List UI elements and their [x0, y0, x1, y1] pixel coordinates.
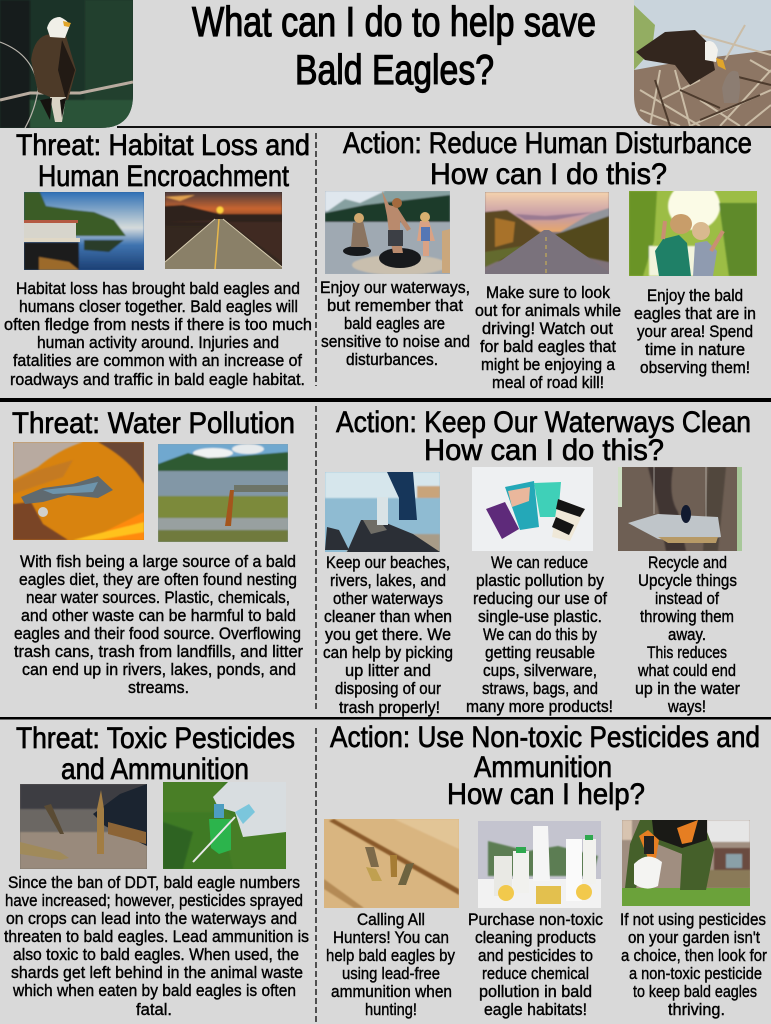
text: enjoy waterways: disturbances.	[346, 350, 438, 369]
text: calling all hunters: Calling All	[357, 910, 425, 929]
photo: children on a lake	[325, 191, 450, 274]
text: calling all hunters: help bald eagles by	[326, 946, 455, 965]
text: calling all hunters: ammunition when	[331, 982, 452, 1001]
text: recycle and upcycle: throwing them	[640, 607, 734, 626]
heading: action keep waterways clean	[336, 406, 751, 467]
text: recycle and upcycle: what could end	[637, 661, 736, 680]
text: look out while driving: driving! Watch out	[482, 319, 613, 338]
heading: action non-toxic: Ammunition	[474, 751, 612, 784]
heading: threat water pollution: Threat: Water Pollution	[12, 407, 295, 440]
text: enjoy waterways: but remember that	[327, 296, 463, 315]
text: recycle and upcycle: Recycle and	[648, 553, 727, 572]
text: look out while driving	[475, 283, 621, 392]
text: pesticide threat: also toxic to bald eagles. When used, the	[13, 945, 299, 964]
heading: threat pesticides	[16, 722, 295, 786]
text: habitat threat: roadways and traffic in bald eagle habitat.	[10, 370, 305, 389]
text: reduce plastic: many more products!	[466, 697, 613, 716]
text: water threat: near water sources. Plastic, chemicals,	[26, 588, 290, 607]
photo: eagle on nest with chick	[634, 0, 771, 126]
text: reduce plastic: reducing our use of	[473, 589, 607, 608]
text: garden pesticide	[620, 910, 767, 1019]
text: water threat: and other waste can be harmful to bald	[21, 606, 296, 625]
text: purchase non-toxic: pollution in bald	[479, 982, 592, 1001]
photo: people with binoculars	[629, 191, 757, 276]
text: enjoy waterways: bald eagles are	[344, 314, 445, 333]
text: pesticide threat: have increased; however, pesticides sprayed	[5, 891, 303, 910]
text: look out while driving: Make sure to look	[486, 283, 610, 302]
text: purchase non-toxic: eagle habitats!	[484, 1000, 587, 1019]
photo: ammunition on stone	[20, 784, 147, 869]
text: habitat threat	[4, 279, 312, 389]
text: purchase non-toxic: cleaning products	[475, 928, 596, 947]
text: enjoy waterways: sensitive to noise and	[321, 332, 470, 351]
heading: threat pesticides: Threat: Toxic Pesticides	[16, 722, 295, 755]
text: pesticide threat: on crops can lead into the waterways and	[6, 909, 297, 928]
text: reduce plastic: cups, silverware,	[483, 661, 597, 680]
text: calling all hunters	[326, 910, 455, 1019]
text: pesticide threat: Since the ban of DDT, bald eagle numbers	[8, 873, 300, 892]
text: habitat threat: human activity around. Injuries and	[37, 333, 279, 352]
text: enjoy waterways	[320, 278, 470, 369]
heading: action reduce disturbance: How can I do this?	[430, 158, 667, 191]
text: keep beaches clean: up litter and	[345, 661, 431, 680]
heading: action reduce disturbance	[343, 127, 752, 191]
text: pesticide threat: fatal.	[136, 1000, 172, 1019]
text: purchase non-toxic: and pesticides to	[478, 946, 593, 965]
text: keep beaches clean	[323, 553, 453, 717]
text: look out while driving: might be enjoying a	[481, 355, 615, 374]
text: recycle and upcycle: ways!	[667, 697, 706, 716]
text: enjoy waterways: Enjoy our waterways,	[320, 278, 470, 297]
text: pesticide threat: threaten to bald eagles. Lead ammunition is	[4, 927, 309, 946]
text: keep beaches clean: disposing of our	[335, 679, 441, 698]
text: keep beaches clean: can help by picking	[323, 643, 453, 662]
photo: pipe draining into lake	[158, 444, 288, 542]
text: recycle and upcycle: instead of	[655, 589, 719, 608]
text: keep beaches clean: trash properly!	[339, 698, 440, 717]
text: habitat threat: often fledge from nests if there is too much	[4, 315, 312, 334]
text: look out while driving: meal of road kill!	[492, 373, 604, 392]
section: pesticides and ammunition	[4, 721, 767, 1019]
text: enjoy eagles in your area	[634, 286, 756, 377]
text: pesticide threat: which when eaten by bald eagles is often	[12, 981, 296, 1000]
text: water threat: eagles and their food source. Overflowing	[14, 624, 301, 643]
text: water threat: With fish being a large source of a bald	[20, 552, 296, 571]
section: habitat loss	[4, 127, 757, 392]
heading: threat habitat loss: Threat: Habitat Loss and	[16, 129, 310, 162]
heading: threat pesticides: and Ammunition	[61, 753, 249, 786]
heading: action keep waterways clean: How can I do this?	[424, 434, 664, 467]
text: purchase non-toxic: reduce chemical	[482, 964, 589, 983]
text: habitat threat: fatalities are common with an increase of	[13, 351, 302, 370]
text: enjoy eagles in your area: observing them!	[640, 358, 750, 377]
text: purchase non-toxic: Purchase non-toxic	[468, 910, 603, 929]
photo: garden spraying	[622, 820, 750, 906]
text: keep beaches clean: other waterways	[333, 589, 443, 608]
text: enjoy eagles in your area: Enjoy the bald	[647, 286, 743, 305]
text: recycle and upcycle: up in the water	[635, 679, 740, 698]
photo: lakeside dock	[24, 192, 144, 270]
text: look out while driving: for bald eagles that	[480, 337, 616, 356]
text: enjoy eagles in your area: eagles that are in	[634, 304, 756, 323]
text: reduce plastic: We can do this by	[483, 625, 597, 644]
photo: orange polluted water	[13, 442, 144, 540]
text: reduce plastic: straws, bags, and	[482, 679, 598, 698]
photo: forest road	[485, 192, 609, 274]
text: recycle and upcycle	[635, 553, 740, 716]
text: keep beaches clean: rivers, lakes, and	[330, 571, 446, 590]
heading: action non-toxic	[330, 721, 760, 811]
photo: road at sunset	[165, 192, 282, 269]
text: enjoy eagles in your area: your area! Spend	[637, 322, 753, 341]
text: water threat: can end up in rivers, lakes, ponds, and	[22, 660, 296, 679]
photo: spraying pesticides	[163, 782, 286, 869]
photo: lead-free bullets on wood	[324, 819, 459, 908]
text: habitat threat: humans closer together. Bald eagles will	[19, 297, 298, 316]
text: calling all hunters: using lead-free	[342, 964, 440, 983]
text: reduce plastic: We can reduce	[491, 553, 588, 572]
photo: picking up litter	[325, 472, 440, 552]
text: pesticide threat: shards get left behind in the animal waste	[11, 963, 303, 982]
title: Bald Eagles?	[295, 46, 494, 93]
text: pesticide threat	[4, 873, 309, 1019]
text: water threat	[14, 552, 303, 697]
text: habitat threat: Habitat loss has brought bald eagles and	[16, 279, 300, 298]
text: keep beaches clean: Keep our beaches,	[326, 553, 450, 572]
text: garden pesticide: thriving.	[668, 1000, 725, 1019]
text: calling all hunters: Hunters! You can	[333, 928, 449, 947]
text: water threat: trash cans, trash from landfills, and litter	[14, 642, 303, 661]
photo: non-toxic cleaning products	[478, 821, 601, 908]
text: keep beaches clean: you get there. We	[325, 625, 451, 644]
text: reduce plastic: getting reusable	[485, 643, 595, 662]
text: recycle and upcycle: Upcycle things	[638, 571, 737, 590]
heading: threat habitat loss	[16, 129, 310, 193]
photo: bald eagle on branch	[0, 0, 133, 128]
text: look out while driving: out for animals while	[475, 301, 621, 320]
text: reduce plastic: single-use plastic.	[478, 607, 602, 626]
text: recycle and upcycle: away.	[668, 625, 706, 644]
title	[192, 0, 596, 93]
text: recycle and upcycle: This reduces	[647, 643, 727, 662]
photo: reusable cups	[472, 467, 593, 551]
text: enjoy eagles in your area: time in nature	[645, 340, 745, 359]
text: reduce plastic	[466, 553, 613, 716]
text: water threat: eagles diet, they are often found nesting	[19, 570, 297, 589]
text: calling all hunters: hunting!	[365, 1000, 417, 1019]
text: purchase non-toxic	[468, 910, 603, 1019]
heading: action non-toxic: How can I help?	[447, 778, 645, 811]
heading: threat habitat loss: Human Encroachment	[38, 160, 290, 193]
text: keep beaches clean: cleaner than when	[324, 607, 452, 626]
text: reduce plastic: plastic pollution by	[476, 571, 604, 590]
photo: bottle bird feeder	[618, 467, 742, 551]
text: water threat: streams.	[128, 678, 189, 697]
section: water pollution	[12, 406, 751, 717]
